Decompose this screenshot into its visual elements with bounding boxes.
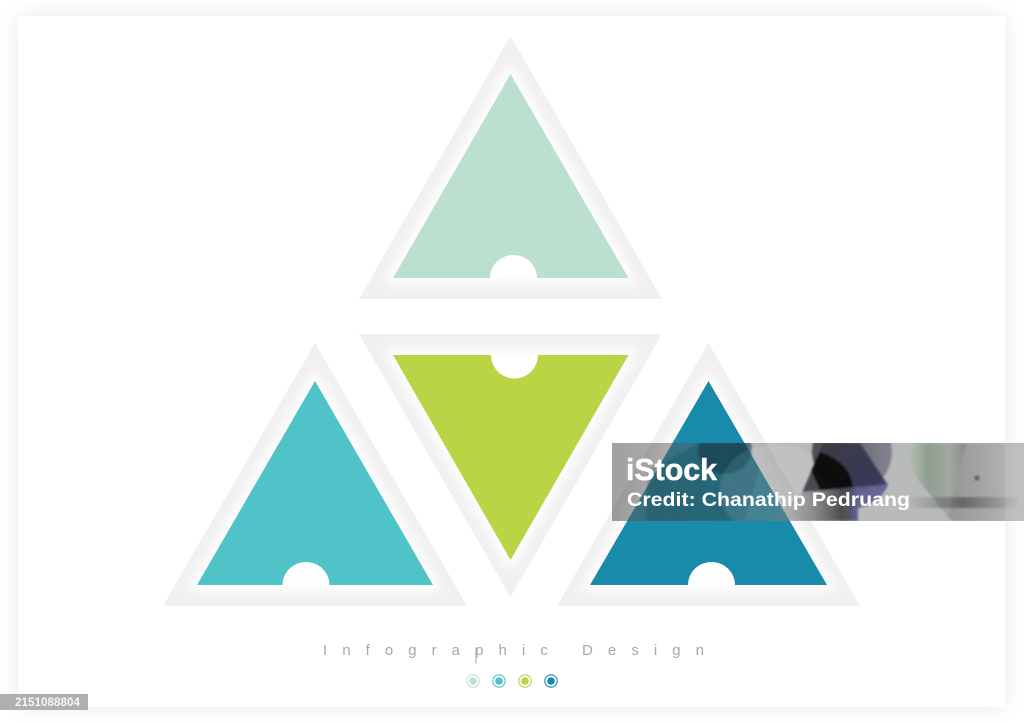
right triangle: deep blue [557,343,860,606]
dot: turquoise [493,675,505,687]
watermark credit line: Credit: Chanathip Pedruang [627,490,910,511]
dot: lime [519,675,531,687]
top triangle: pale green [359,36,662,299]
image id tag [0,694,88,710]
watermark logo: iStock: iStock [626,452,718,487]
left triangle: turquoise [163,343,467,606]
centre inverted triangle: lime [359,334,662,597]
title: Infographic Design: Infographic Design [323,642,704,659]
image id tag: 2151088804 [15,697,81,709]
dot: pale green [467,675,479,687]
watermark band [612,443,1024,521]
legend dots [467,675,557,687]
dot: deep blue [545,675,557,687]
